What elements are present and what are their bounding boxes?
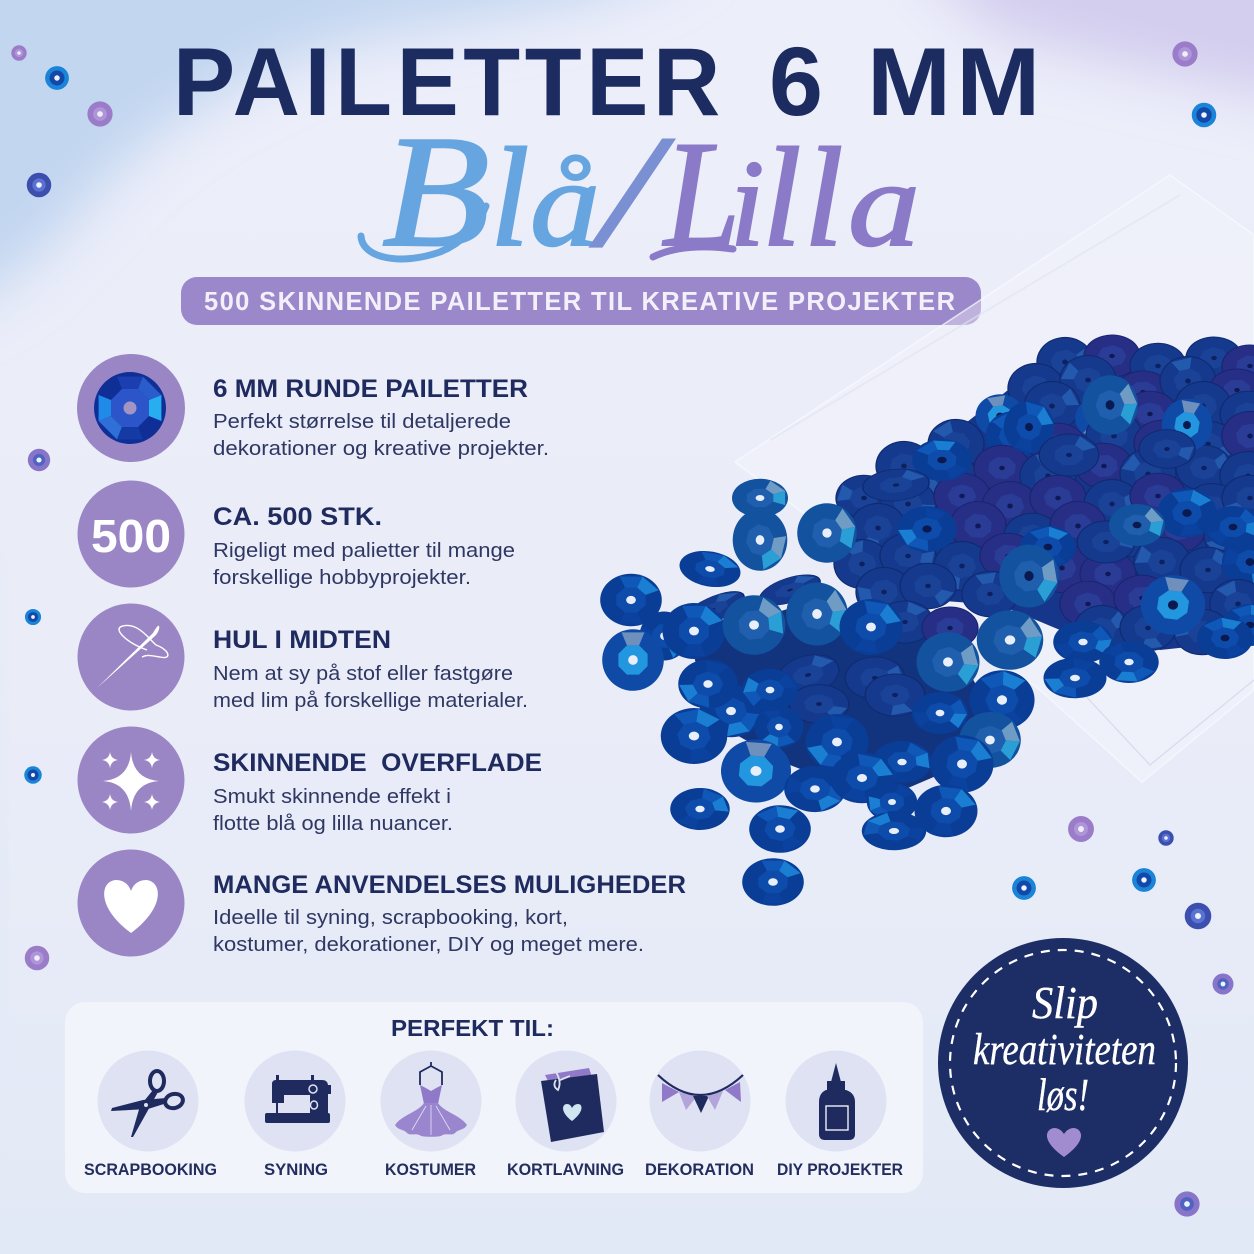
scattered sequins [600, 479, 1171, 906]
icon: scissors [98, 1050, 198, 1152]
script subtitle: / [590, 102, 674, 280]
tagline pill: 500 SKINNENDE PAILETTER TIL KREATIVE PROJEKTER [204, 288, 955, 316]
label: DEKORATION [645, 1161, 754, 1179]
description: dekorationer og kreative projekter. [213, 437, 549, 460]
icon: needle and thread [78, 604, 184, 710]
badge [938, 938, 1188, 1188]
description [213, 662, 528, 712]
script subtitle: å [530, 135, 600, 272]
icon: dress [380, 1050, 482, 1152]
title: 6 [769, 27, 823, 136]
badge text [973, 977, 1156, 1120]
title: MM [867, 27, 1045, 136]
icon: heart [78, 850, 184, 956]
description: med lim på forskellige materialer. [213, 689, 528, 712]
heading: HUL I MIDTEN [213, 626, 391, 654]
icon: bunting [650, 1050, 750, 1152]
script subtitle: l [762, 118, 801, 276]
icon: card [516, 1050, 616, 1152]
icon: 500 [78, 480, 184, 588]
script subtitle: l [804, 118, 843, 276]
badge text: kreativiteten [973, 1025, 1156, 1074]
feature: uses [78, 850, 686, 956]
label: SYNING [264, 1161, 328, 1179]
label: DIY PROJEKTER [777, 1161, 903, 1179]
title [173, 27, 1045, 136]
script subtitle: i [730, 135, 764, 272]
icon: glue bottle [786, 1050, 886, 1152]
description: forskellige hobbyprojekter. [213, 566, 471, 589]
description [213, 410, 549, 460]
description: Nem at sy på stof eller fastgøre [213, 662, 513, 685]
description: flotte blå og lilla nuancer. [213, 812, 453, 835]
script subtitle: B [382, 102, 490, 280]
feature: shine [78, 726, 542, 835]
icon: badge heart [1047, 1128, 1081, 1157]
description: Smukt skinnende effekt i [213, 785, 451, 808]
feature: 6 mm [77, 354, 549, 462]
description: kostumer, dekorationer, DIY og meget mere. [213, 933, 644, 956]
heading: MANGE ANVENDELSES MULIGHEDER [213, 871, 686, 899]
sequin pile [690, 329, 1254, 800]
script subtitle: L [662, 110, 740, 278]
feature: 500 [78, 480, 515, 589]
heading: 6 MM RUNDE PAILETTER [213, 375, 528, 403]
script subtitle: l [490, 118, 529, 276]
title: PAILETTER [173, 28, 725, 136]
description: Perfekt størrelse til detaljerede [213, 410, 511, 433]
plastic bag [735, 175, 1254, 782]
panel: perfect for [65, 1002, 923, 1193]
label: KOSTUMER [385, 1161, 476, 1179]
description: Ideelle til syning, scrapbooking, kort, [213, 906, 568, 929]
badge text: Slip [1032, 977, 1098, 1028]
description [213, 539, 515, 589]
tagline pill [181, 277, 981, 325]
icon: sewing machine [244, 1050, 346, 1152]
label: SCRAPBOOKING [84, 1161, 217, 1179]
label: KORTLAVNING [507, 1161, 624, 1179]
feature: hole [78, 604, 528, 712]
script subtitle: a [848, 137, 920, 272]
description [213, 785, 453, 835]
heading: CA. 500 STK. [213, 503, 382, 531]
script subtitle [361, 102, 920, 280]
description: Rigeligt med palietter til mange [213, 539, 515, 562]
heading: SKINNENDE OVERFLADE [213, 749, 542, 777]
panel heading: PERFEKT TIL: [391, 1015, 554, 1041]
icon: sequin [77, 354, 185, 462]
badge text: løs! [1037, 1069, 1089, 1120]
icon: sparkles [78, 726, 184, 834]
description [213, 906, 644, 956]
icon: 500: 500 [91, 510, 171, 562]
